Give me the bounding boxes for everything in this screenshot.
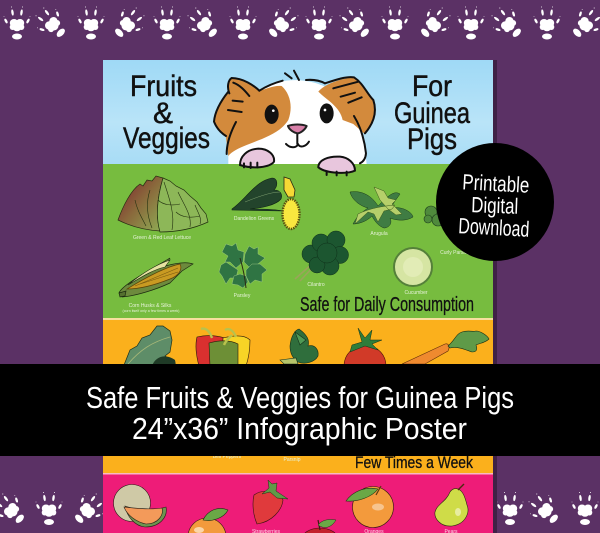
panel: orange few times a week section bbox=[103, 318, 493, 473]
illustration: orange bbox=[346, 486, 394, 528]
illustration: pear bbox=[435, 484, 468, 526]
illustration: dandelion greens bbox=[232, 177, 300, 229]
illustration: kale bbox=[124, 326, 176, 366]
label: Green & Red Leaf Lettuce bbox=[133, 235, 191, 241]
badge: printable digital download: Download bbox=[458, 213, 530, 242]
labels: pink section bbox=[252, 529, 458, 533]
illustration: cilantro bbox=[295, 231, 348, 288]
illustration: apple bbox=[301, 520, 339, 533]
illustration: bell peppers bbox=[196, 329, 250, 366]
label: Curly Parsley bbox=[440, 250, 470, 256]
illustration: cantaloupe bbox=[114, 484, 166, 527]
panel: poster header bbox=[103, 60, 493, 164]
illustration: tomato bbox=[344, 328, 386, 387]
heading: Fruits & Veggies bbox=[123, 70, 210, 155]
heading: For Guinea Pigs bbox=[394, 70, 470, 156]
illustration: strawberry bbox=[253, 480, 288, 524]
heading: For Guinea Pigs: Guinea bbox=[394, 97, 470, 130]
caption: Few Times a Week: Few Times a Week bbox=[355, 453, 473, 472]
banner: title strip: Safe Fruits & Veggies for Guinea Pigs bbox=[86, 380, 514, 415]
paw print row: top bbox=[4, 2, 600, 44]
illustration: arugula bbox=[350, 187, 413, 237]
label: Bell Peppers: Bell Peppers bbox=[213, 454, 242, 460]
label: (corn itself only a few times a week) bbox=[123, 309, 179, 313]
label: Cucumber bbox=[404, 290, 428, 296]
illustration: green and red leaf lettuce bbox=[118, 176, 208, 241]
illustration: corn bbox=[119, 258, 193, 313]
panel: green safe daily section bbox=[103, 164, 493, 318]
banner: title strip: 24”x36” Infographic Poster bbox=[132, 411, 467, 446]
label: Corn Husks & Silks bbox=[129, 303, 172, 309]
caption: Safe for Daily Consumption: Safe for Daily Consumption bbox=[300, 294, 474, 316]
heading: Fruits & Veggies: Fruits bbox=[130, 70, 197, 103]
illustration: bok choy bbox=[280, 329, 318, 364]
label: Dandelion Greens bbox=[234, 216, 275, 222]
label: Parsnip: Parsnip bbox=[284, 457, 301, 463]
banner: title strip bbox=[0, 364, 600, 456]
illustration: carrot bbox=[402, 331, 489, 364]
heading: Fruits & Veggies: Veggies bbox=[123, 122, 210, 155]
badge: printable digital download bbox=[436, 143, 554, 261]
heading: Fruits & Veggies: & bbox=[153, 97, 173, 130]
illustration: peach bbox=[188, 508, 228, 533]
heading: For Guinea Pigs: Pigs bbox=[407, 123, 457, 156]
label: Arugula bbox=[370, 231, 388, 237]
label: Cilantro bbox=[307, 282, 325, 288]
poster shadow bbox=[493, 60, 497, 533]
badge: printable digital download: Digital bbox=[471, 192, 519, 219]
heading: For Guinea Pigs: For bbox=[412, 70, 452, 103]
illustration: curly parsley bbox=[424, 206, 470, 256]
panel: pink section bbox=[103, 473, 493, 533]
illustration: cucumber bbox=[394, 248, 432, 296]
label bbox=[123, 303, 179, 313]
illustration: guinea pig bbox=[214, 71, 375, 175]
label: Parsley bbox=[234, 293, 251, 299]
illustration: parsley bbox=[219, 243, 267, 299]
badge: printable digital download: Printable bbox=[462, 169, 530, 198]
paw print row: bottom bbox=[0, 488, 598, 530]
